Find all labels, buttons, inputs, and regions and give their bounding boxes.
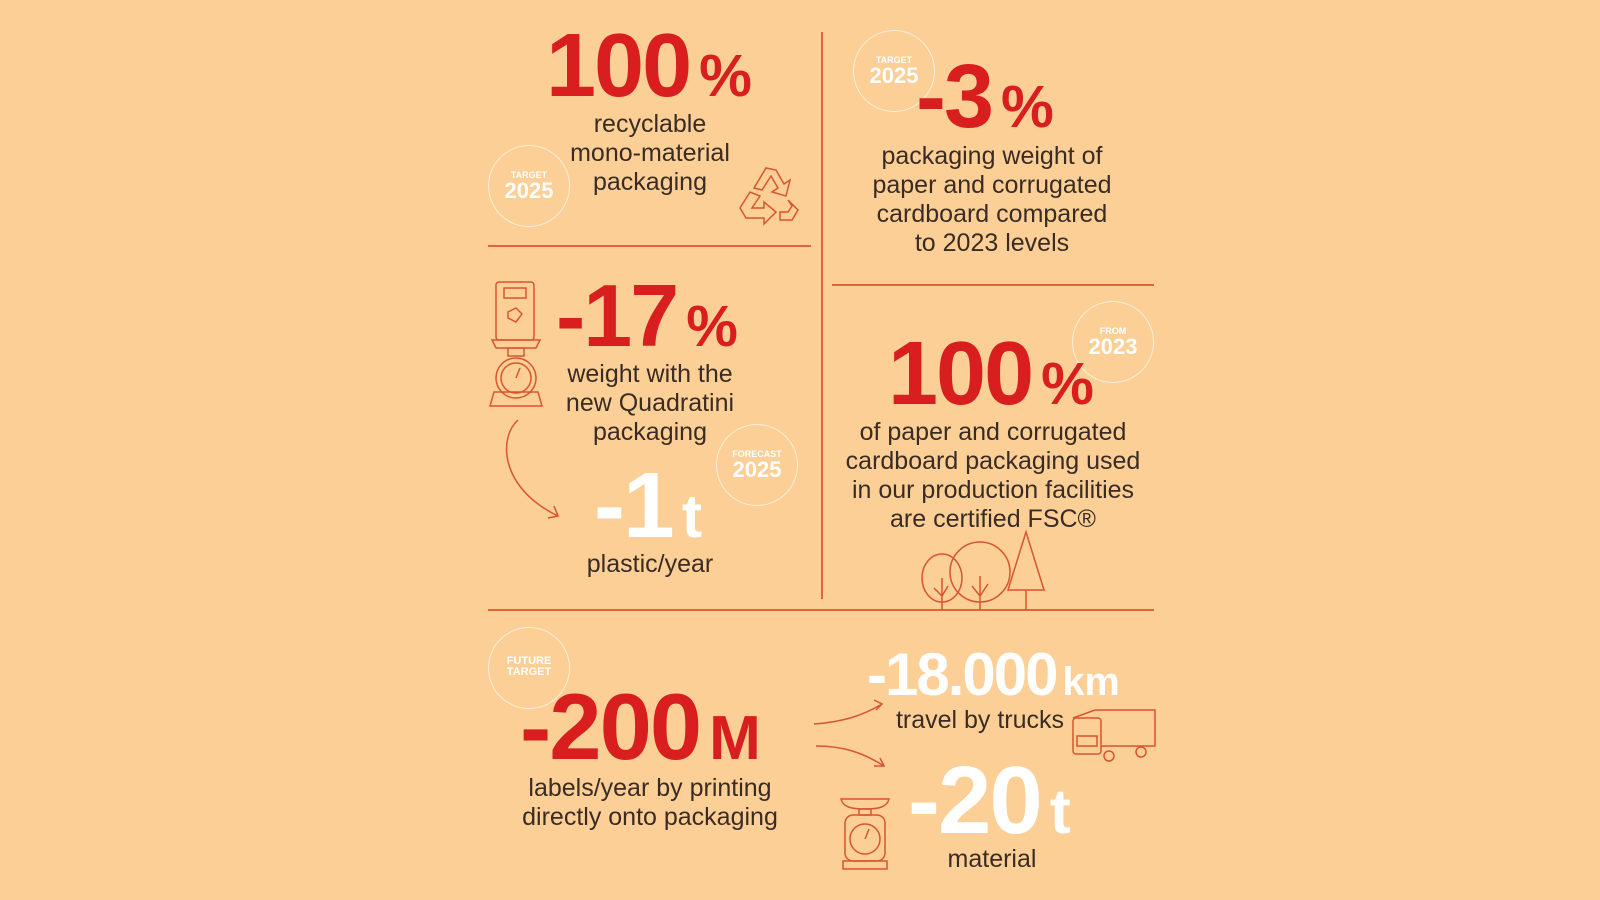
circle: target 2025 right	[853, 30, 935, 112]
stat: 100% recyclable: 100%	[546, 16, 752, 116]
circle: from 2023: 2023	[1089, 334, 1137, 359]
text: FSC: are certified FSC®	[890, 505, 1096, 533]
circle: future target: FUTURE	[507, 655, 551, 667]
circle: from 2023: FROM	[1100, 326, 1126, 336]
text: FSC: of paper and corrugated	[860, 418, 1126, 446]
stat: 100% FSC: 100%	[888, 324, 1094, 424]
icon: kitchen scale	[840, 798, 890, 870]
text: material: material	[948, 845, 1036, 873]
text: weight with quadratini: new Quadratini	[566, 389, 734, 417]
text: travel by trucks: travel by trucks	[896, 706, 1064, 734]
circle: forecast 2025	[716, 424, 798, 506]
icon: trees	[921, 530, 1045, 610]
circle: from 2023	[1072, 301, 1154, 383]
text: recyclable: recyclable	[594, 110, 706, 138]
text: packaging weight: to 2023 levels	[915, 229, 1069, 257]
text: weight with quadratini: packaging	[593, 418, 707, 446]
circle: target 2025 right: TARGET	[876, 55, 912, 65]
circle: future target: TARGET	[507, 666, 551, 678]
text: labels/year: directly onto packaging	[522, 803, 778, 831]
icon: truck	[1072, 709, 1156, 762]
stat: -200M: -200M	[520, 674, 761, 779]
circle: target 2025 left	[488, 145, 570, 227]
circle: forecast 2025: 2025	[733, 457, 781, 482]
text: packaging weight: paper and corrugated	[872, 171, 1112, 199]
stat: -17%: -17%	[556, 266, 738, 365]
text: recyclable	[570, 110, 730, 196]
text: recyclable: mono-material	[570, 139, 730, 167]
circle: target 2025 left: 2025	[505, 178, 553, 203]
stat: -3%: -3%	[916, 47, 1054, 147]
icon: bag on scale	[489, 281, 543, 407]
text: recyclable: packaging	[593, 168, 707, 196]
text: packaging weight: cardboard compared	[877, 200, 1107, 228]
icon: recycle	[739, 167, 799, 226]
text: packaging weight: packaging weight of	[882, 142, 1102, 170]
arrow: curve	[506, 420, 559, 519]
text: labels/year: labels/year by printing	[528, 774, 772, 802]
stat: -18000 km: -18.000km	[867, 641, 1120, 708]
arrows: split	[814, 699, 886, 767]
text: plastic/year: plastic/year	[587, 550, 713, 578]
text: weight with quadratini	[566, 360, 734, 446]
stat: -20t: -20t	[908, 747, 1071, 854]
circle: future target	[488, 627, 570, 709]
circle: forecast 2025: FORECAST	[732, 449, 782, 459]
text: packaging weight	[872, 142, 1112, 257]
stat: -1t: -1t	[594, 453, 702, 557]
text: labels/year	[522, 774, 778, 831]
text: FSC: cardboard packaging used	[846, 447, 1140, 475]
text: weight with quadratini: weight with the	[567, 360, 733, 388]
text: FSC	[846, 418, 1140, 533]
circle: target 2025 right: 2025	[870, 63, 918, 88]
circle: target 2025 left: TARGET	[511, 170, 547, 180]
text: FSC: in our production facilities	[852, 476, 1134, 504]
